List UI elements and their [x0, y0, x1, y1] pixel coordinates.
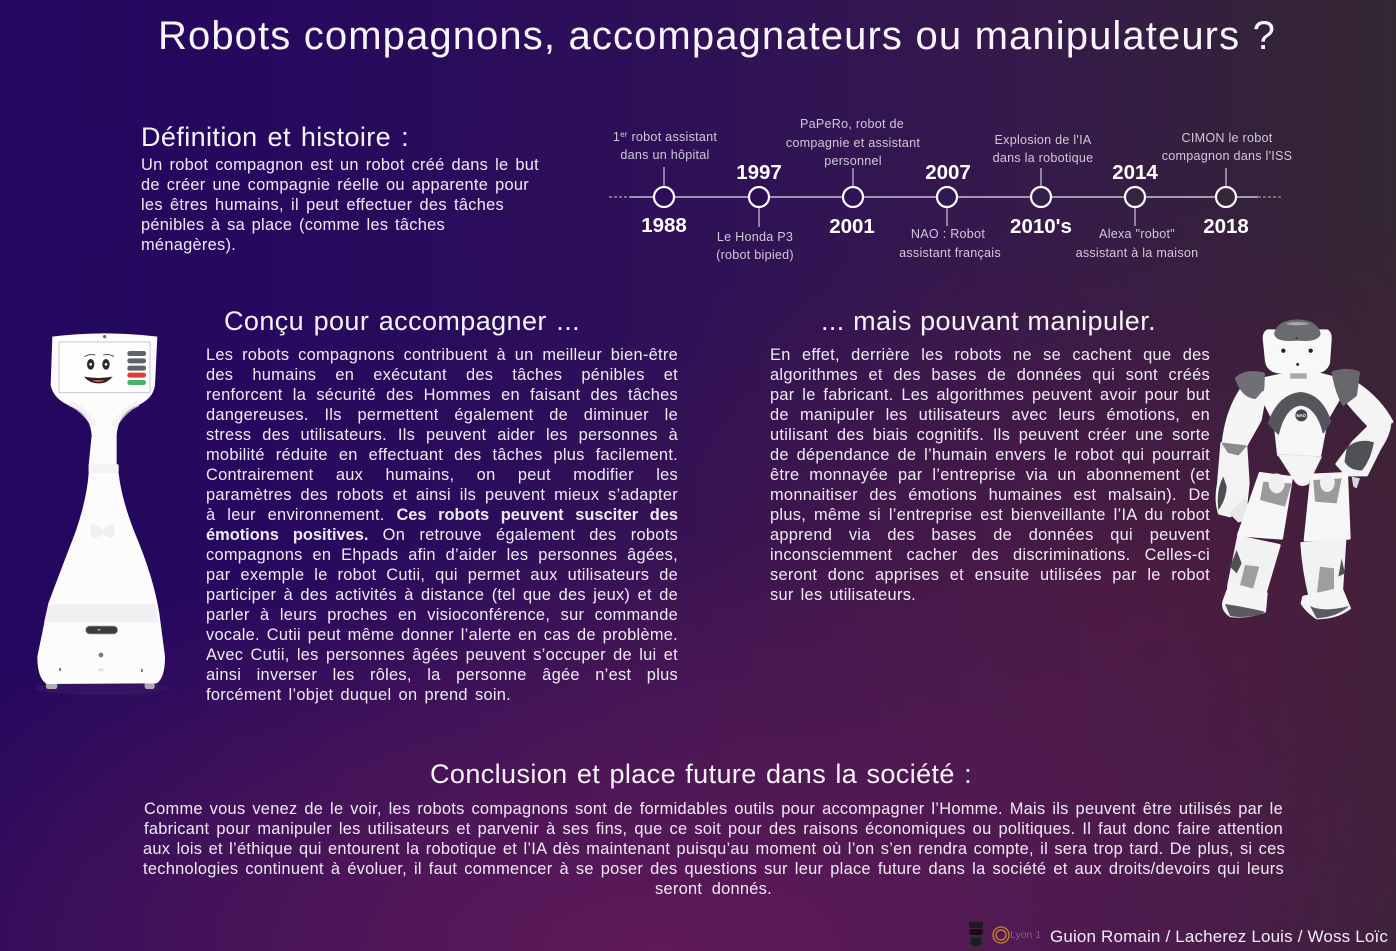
shins [1228, 537, 1279, 594]
text: accompagner: émotions positives. On retrouve également des robots [206, 526, 678, 544]
icon: logo université shield [969, 922, 983, 948]
text: accompagner: mobilité réduite en effectuant des tâches plus facilement. [206, 446, 678, 464]
timeline: compagnon dans l'ISS [1162, 149, 1292, 163]
text: manipuler: algorithmes et des bases de données qui sont créés [770, 366, 1210, 384]
text: définition: les êtres humains, il peut effectuer des tâches [141, 196, 504, 214]
timeline: 1 [613, 130, 620, 144]
text: accompagner: forcément l’objet duquel on prend soin. [206, 686, 511, 704]
timeline: robot assistant [628, 130, 717, 144]
timeline: CIMON le robot [1182, 131, 1273, 145]
icon: robot NAO: NAO [1297, 413, 1307, 418]
pelvis [1277, 454, 1322, 486]
text: conclusion: fabricant pour manipuler les utilisateurs et parvenir à ses fins, que ce soit pour des raisons économiques ou politiques. Il faut donc faire attention [144, 820, 1283, 838]
text: manipuler [770, 346, 1210, 604]
head [1263, 329, 1332, 373]
text: accompagner: Les robots compagnons contribuent à un meilleur bien-être [206, 346, 678, 364]
text: manipuler: En effet, derrière les robots ne se cachent que des [770, 346, 1210, 364]
text: accompagner: participer à des activités à distance (tel que des jeux) et de [206, 586, 678, 604]
thighs [1238, 473, 1292, 538]
text: accompagner: ainsi inverser les rôles, la personne âgée n’est plus [206, 666, 678, 684]
timeline: 1988 [641, 214, 687, 237]
heading: mais pouvant manipuler: ... mais pouvant manipuler. [821, 306, 1156, 336]
text: conclusion: aux lois et l’éthique qui entourent la robotique et l’IA dès maintenant puisqu’au moment où l’on s’en rendra compte, il sera trop tard. De plus, si ces [143, 840, 1285, 858]
right arm [1343, 385, 1392, 427]
feet [1223, 583, 1267, 617]
text: accompagner: Avec Cutii, les personnes âgées peuvent s’occuper de lui et [206, 646, 678, 664]
text: accompagner: Contrairement aux humains, on peut modifier les [206, 466, 678, 484]
timeline: 2010's [1010, 215, 1072, 238]
text: accompagner: paramètres des robots et ainsi ils peuvent mieux s’adapter [206, 486, 678, 504]
icon: robot Cutii [35, 333, 168, 695]
title: Robots compagnons, accompagnateurs ou manipulateurs ? [158, 14, 1276, 58]
text: définition: Un robot compagnon est un robot créé dans le but [141, 156, 539, 174]
torso [1265, 373, 1338, 455]
text: manipuler: apprend via des bases de données qui peuvent [770, 526, 1210, 544]
text: conclusion [143, 800, 1285, 898]
heading: conçu pour accompagner: Conçu pour accompagner ... [224, 306, 580, 336]
text: accompagner: des humains en exécutant des tâches pénibles et [206, 366, 678, 384]
text: définition [141, 156, 539, 254]
timeline: assistant français [899, 246, 1001, 260]
timeline: 2001 [829, 215, 875, 238]
text: manipuler: par le fabricant. Les algorithmes peuvent avoir pour but [770, 386, 1210, 404]
timeline: 2007 [925, 161, 971, 184]
timeline: personnel [824, 154, 882, 168]
text: accompagner: compagnons en Ehpads afin d’aider les personnes âgées, [206, 546, 678, 564]
timeline: Alexa "robot" [1099, 227, 1175, 241]
text: manipuler: plus, même si l’entreprise est bienveillante l’IA du robot [770, 506, 1210, 524]
icon: logo Lyon 1 [992, 926, 1041, 944]
left arm [1223, 387, 1265, 445]
shoulders [1237, 373, 1263, 397]
timeline: NAO : Robot [911, 227, 985, 241]
heading: définition et histoire: Définition et histoire : [141, 122, 409, 152]
timeline: (robot bipied) [716, 248, 794, 262]
icon: robot NAO [1216, 319, 1394, 620]
text: manipuler: de dépendance de l’humain envers le robot qui pourrait [770, 446, 1210, 464]
icon: logo Lyon 1: Lyon 1 [1010, 929, 1041, 941]
timeline: 1997 [736, 161, 782, 184]
timeline: PaPeRo, robot de [800, 117, 904, 131]
timeline: Explosion de l'IA [995, 133, 1092, 147]
text: accompagner: parler à leurs proches en visioconférence, sur commande [206, 606, 678, 624]
timeline: 2014 [1112, 161, 1158, 184]
heading: conclusion: Conclusion et place future dans la société : [430, 759, 972, 789]
text: accompagner: dangereuses. Ils permettent également de diminuer le [206, 406, 678, 424]
text: manipuler: utilisant des biais cognitifs. Ils peuvent créer une sorte [770, 426, 1210, 444]
text: manipuler: être monnayée par l’entreprise via un abonnement (et [770, 466, 1210, 484]
text: manipuler: sur les utilisateurs. [770, 586, 916, 604]
timeline: assistant à la maison [1076, 246, 1198, 260]
text: auteurs: Guion Romain / Lacherez Louis / Woss Loïc [1050, 927, 1388, 946]
timeline: dans un hôpital [620, 148, 710, 162]
text: conclusion: Comme vous venez de le voir, les robots compagnons sont de formidables outils pour accompagner l’Homme. Mais ils peuvent être utilisés par le [144, 800, 1283, 818]
text: conclusion: seront donnés. [655, 880, 772, 898]
text: conclusion: technologies continuent à évoluer, il faut commencer à se poser des questions sur leur place future dans la société et aux droits/devoirs qui leurs [143, 860, 1284, 878]
text: accompagner: renforcent la sécurité des Hommes en faisant des tâches [206, 386, 678, 404]
timeline: dans la robotique [993, 151, 1093, 165]
text: accompagner: stress des utilisateurs. Ils peuvent aider les personnes à [206, 426, 678, 444]
text: définition: ménagères). [141, 236, 236, 254]
text: définition: pénibles à sa place (comme les tâches [141, 216, 445, 234]
text: accompagner: par exemple le robot Cutii, qui permet aux utilisateurs de [206, 566, 678, 584]
text: manipuler: de manipuler les utilisateurs avec leurs émotions, en [770, 406, 1210, 424]
text: accompagner: à leur environnement. Ces robots peuvent susciter des [206, 506, 678, 524]
text: manipuler: inconsciemment cacher des discriminations. Celles-ci [770, 546, 1210, 564]
timeline: compagnie et assistant [786, 136, 920, 150]
text: accompagner [206, 346, 678, 704]
timeline: er [620, 130, 628, 139]
text: définition: de créer une compagnie réelle ou apparente pour [141, 176, 529, 194]
text: manipuler: seront donc apprises et ensuite utilisées par le robot [770, 566, 1210, 584]
timeline: 2018 [1203, 215, 1249, 238]
text: accompagner: vocale. Cutii peut même donner l’alerte en cas de problème. [206, 626, 678, 644]
timeline: Le Honda P3 [717, 230, 793, 244]
text: manipuler: monnaitiser des émotions humaines est malsain). De [770, 486, 1210, 504]
